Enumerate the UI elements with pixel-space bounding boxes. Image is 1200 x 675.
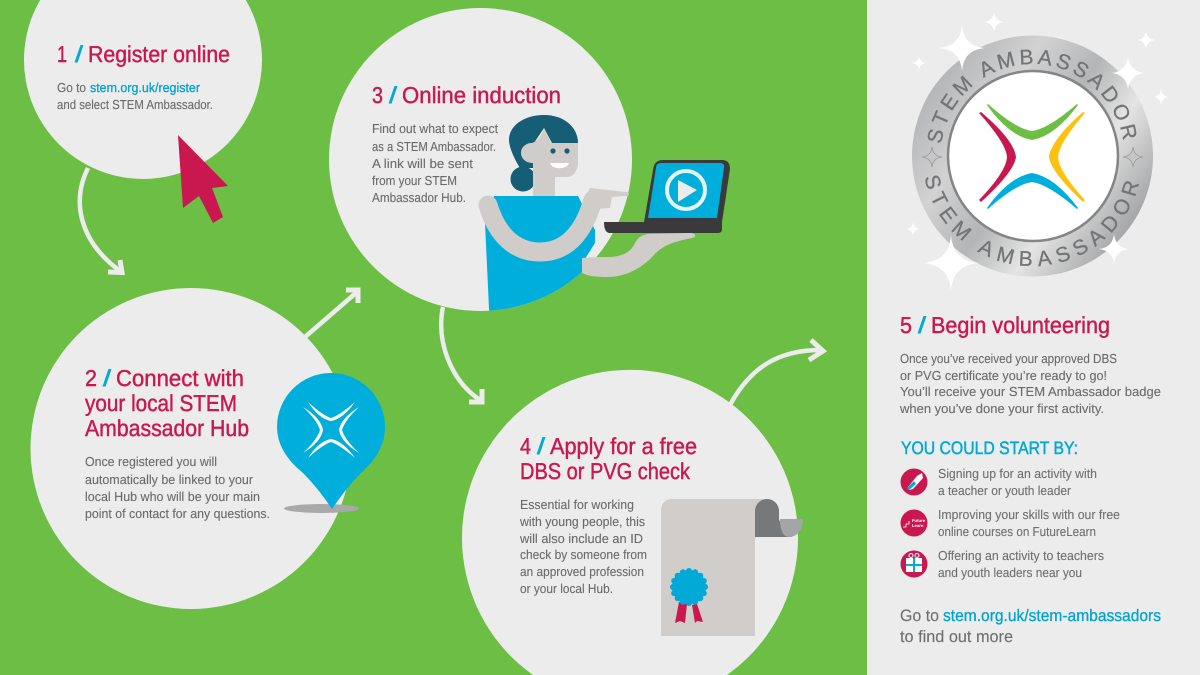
list item: FutureLearn: Improving your skills with our free [938, 507, 1120, 522]
list item: FutureLearn: online courses on FutureLearn [938, 524, 1096, 539]
list item: offering an activity [900, 548, 1104, 580]
heading: step 2: / [103, 365, 112, 391]
heading: step 2: Connect with [116, 365, 244, 391]
arrow: step 1 to step 2 [80, 168, 122, 272]
text: step 4 body [519, 497, 647, 596]
heading: step 4 [520, 433, 697, 484]
icon: laptop [604, 160, 730, 233]
panel: step 4 DBS or PVG check [462, 370, 803, 675]
text: step 1 body: Go to [57, 80, 86, 95]
list item: FutureLearn [900, 507, 1120, 539]
arrow: step 2 to step 3 [305, 290, 358, 337]
text: step 4 body: or your local Hub. [520, 581, 613, 596]
text: step 3 body: Ambassador Hub. [372, 190, 466, 205]
heading: you could start by: YOU COULD START BY: [901, 438, 1078, 458]
text: step 5 body: when you’ve done your first activity. [899, 401, 1104, 416]
heading: step 1: 1 [57, 41, 67, 67]
icon: FutureLearn [900, 510, 928, 536]
panel: step 3 online induction [329, 8, 730, 330]
arrow: step 4 to step 5 [730, 340, 823, 405]
icon: ribbon rosette [670, 568, 708, 623]
sparkles [906, 12, 1169, 291]
text: step 5 body: or PVG certificate you’re ready to go! [900, 368, 1107, 383]
text: step 4 body: check by someone from [520, 547, 647, 562]
heading: step 1: Register online [88, 41, 230, 67]
text: step 4 body: with young people, this [519, 514, 645, 529]
icon: map pin [277, 373, 385, 513]
list item: signing up: Signing up for an activity with [938, 466, 1097, 481]
icon: gift [900, 550, 928, 578]
list item: signing up [900, 466, 1097, 498]
heading: step 4: 4 [520, 433, 531, 459]
heading: step 2: 2 [85, 365, 97, 391]
heading: step 4: Apply for a free [550, 433, 697, 459]
list item: offering an activity: Offering an activity to teachers [938, 548, 1104, 563]
heading: step 1: / [75, 41, 84, 67]
panel: step 2 connect with hub [30, 288, 385, 609]
text: step 3 body [372, 121, 498, 205]
list item: signing up: a teacher or youth leader [938, 483, 1072, 498]
text: find out more [900, 607, 1161, 646]
heading: step 5: Begin volunteering [931, 312, 1110, 338]
green background [0, 0, 867, 675]
text: step 2 body: local Hub who will be your main [85, 489, 260, 504]
icon: certificate scroll [661, 499, 803, 636]
text: step 2 body: automatically be linked to your [85, 472, 254, 487]
heading: step 3: 3 [372, 82, 383, 108]
icon: FutureLearn: Future [912, 518, 926, 523]
text: step 4 body: will also include an ID [519, 531, 643, 546]
list item: offering an activity: and youth leaders near you [938, 565, 1082, 580]
text: step 2 body: Once registered you will [85, 454, 217, 469]
logo: four coloured boomerangs [979, 104, 1085, 209]
text: step 3 body: A link will be sent [372, 156, 473, 171]
text: find out more: stem.org.uk/stem-ambassadors [943, 607, 1161, 625]
text: step 1 body: and select STEM Ambassador. [57, 97, 213, 112]
text: step 1 body [57, 80, 213, 112]
heading: step 2 [85, 365, 249, 441]
badge: STEM Ambassador silver medal [908, 14, 1168, 289]
heading: step 3: / [389, 82, 398, 108]
text: step 5 body: Once you’ve received your approved DBS [900, 351, 1117, 366]
text: step 4 body: Essential for working [520, 497, 634, 512]
heading: step 5: / [918, 312, 927, 338]
panel: step 1 register online [24, 0, 262, 223]
heading: step 4: / [537, 433, 546, 459]
text: step 2 body [85, 454, 270, 521]
heading: step 5: 5 [900, 312, 912, 338]
badge text: top arc: STEM AMBASSADOR [928, 50, 1136, 143]
text: step 1 body: stem.org.uk/register [90, 80, 201, 95]
text: step 2 body: point of contact for any questions. [85, 506, 270, 521]
text: step 3 body: Find out what to expect [372, 121, 498, 136]
heading: step 2: Ambassador Hub [85, 415, 249, 441]
arrow: step 3 to step 4 [441, 307, 482, 402]
heading: step 4: DBS or PVG check [520, 458, 690, 484]
text: find out more: to find out more [900, 628, 1013, 646]
heading: step 2: your local STEM [85, 390, 237, 416]
text: step 3 body: from your STEM [372, 173, 457, 188]
heading: step 3: Online induction [402, 82, 561, 108]
text: step 4 body: an approved profession [520, 564, 644, 579]
badge text: bottom arc: STEM AMBASSADOR [925, 176, 1140, 266]
text: step 5 body [899, 351, 1161, 416]
illustration: woman with laptop [485, 115, 730, 330]
icon: mouse cursor [178, 135, 228, 223]
text: step 3 body: as a STEM Ambassador. [372, 139, 496, 154]
panel: step 5 begin volunteering [867, 0, 1200, 675]
icon: pencil [900, 468, 928, 496]
text: step 5 body: You’ll receive your STEM Ambassador badge [900, 384, 1161, 399]
icon: FutureLearn: Learn [912, 523, 924, 528]
text: find out more: Go to [900, 607, 939, 625]
